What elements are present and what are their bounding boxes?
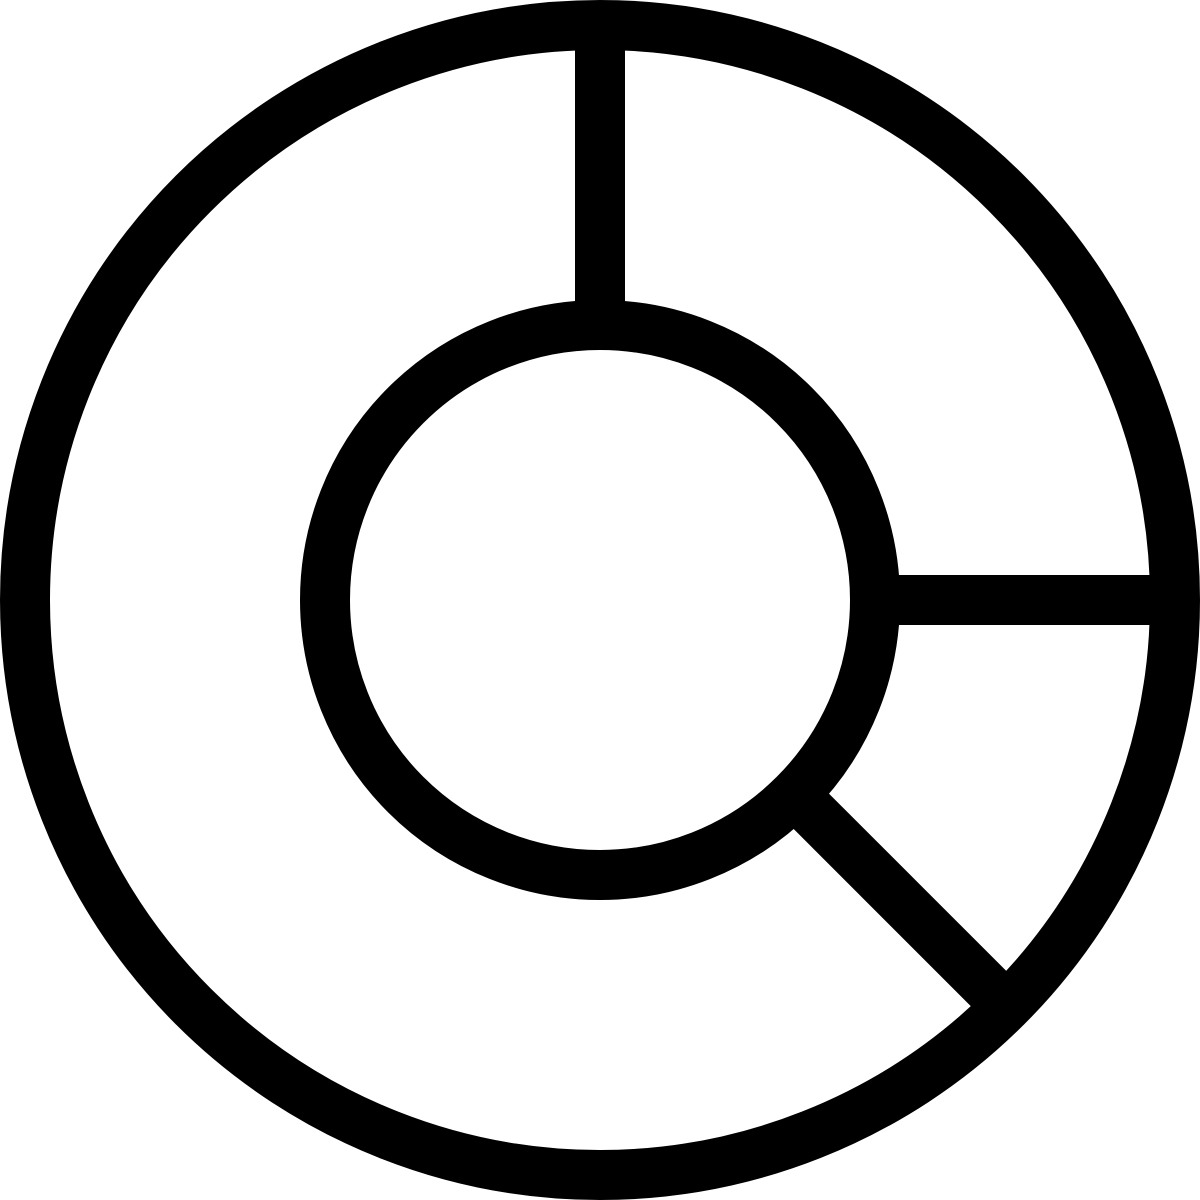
divider: right segment [875, 575, 1175, 625]
inner ring [325, 325, 875, 875]
divider: lower-right segment [794, 794, 1006, 1006]
divider: top segment [575, 25, 625, 325]
